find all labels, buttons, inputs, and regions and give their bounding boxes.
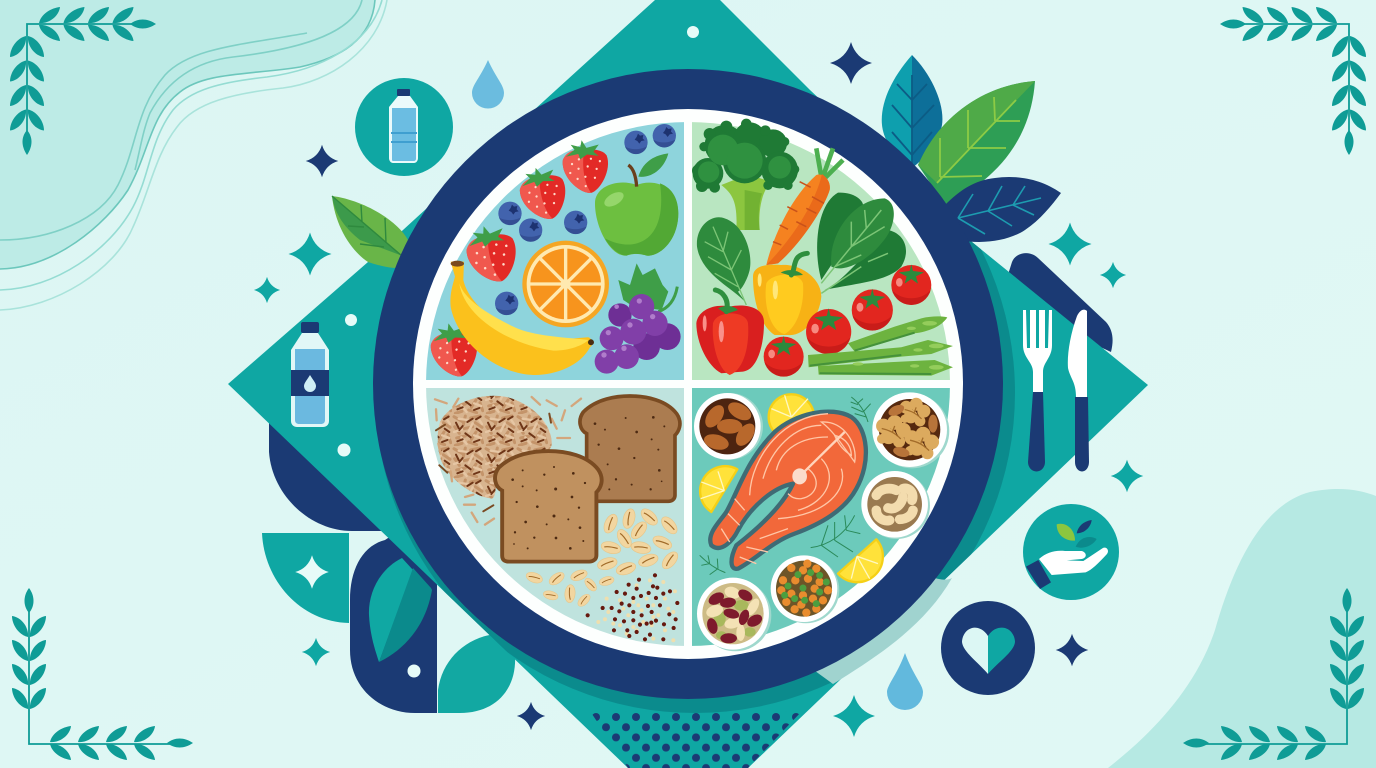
bottom-right blob xyxy=(1108,489,1376,768)
pale crescent under plate xyxy=(800,572,952,684)
strawberries xyxy=(427,138,611,381)
navy rounded shape with leaf xyxy=(350,530,437,713)
teal half round with star xyxy=(262,533,349,623)
icon: water drop top xyxy=(472,60,504,108)
corner sprig: bottom left xyxy=(12,588,193,760)
white dots on diamond xyxy=(338,26,699,456)
dark teal plate shadow xyxy=(381,242,1015,713)
icon: teal-blue leaf xyxy=(882,55,942,168)
bowl: peas and carrots xyxy=(771,555,839,623)
blueberries xyxy=(495,124,676,315)
tomatoes xyxy=(764,264,931,377)
icon: water bottle in circle xyxy=(355,78,453,176)
top-left wave shape xyxy=(0,0,387,310)
icon: left green leaf xyxy=(332,196,420,268)
vegetable items xyxy=(692,119,953,377)
icon: hand with sprout xyxy=(1023,504,1119,600)
icon: knife xyxy=(1068,310,1089,472)
oats xyxy=(525,506,681,609)
banana xyxy=(450,261,594,375)
plate divider xyxy=(416,112,960,656)
grain items xyxy=(435,396,681,640)
yellow pepper xyxy=(753,253,821,335)
fruit background xyxy=(426,120,684,380)
corner sprig: bottom right xyxy=(1183,588,1364,760)
icon: navy leaf xyxy=(945,177,1061,242)
apple xyxy=(595,153,678,256)
sparkle stars xyxy=(254,42,1143,737)
spinach leaf left xyxy=(697,217,750,305)
icon: fork xyxy=(1023,310,1052,472)
bowl: cashews xyxy=(861,471,930,539)
quadrant: protein xyxy=(692,388,952,651)
icon: water drop bottom xyxy=(887,653,923,710)
bowl: walnuts xyxy=(872,392,949,468)
bowl: almonds xyxy=(694,393,763,460)
teal diamond backdrop xyxy=(228,0,1148,768)
icon: heart in circle xyxy=(941,601,1035,695)
quadrant: vegetables xyxy=(692,119,953,380)
spinach leaves right xyxy=(817,193,906,293)
icon: white star xyxy=(295,555,329,589)
navy rounded tab behind right of diamond xyxy=(1000,253,1113,352)
quadrant: fruits xyxy=(426,120,684,381)
icon: sprout leaves xyxy=(1057,520,1097,548)
broccoli xyxy=(692,119,799,230)
icon: white drop xyxy=(304,375,316,392)
quadrant: whole grains xyxy=(426,388,684,650)
red pepper xyxy=(696,290,764,375)
front bread slice xyxy=(495,451,602,562)
wild rice pile xyxy=(435,396,581,525)
dot pattern xyxy=(590,711,802,768)
dill sprigs xyxy=(700,397,871,575)
corner sprig: top right xyxy=(1220,7,1366,155)
corner sprig: top left xyxy=(10,7,156,155)
teal round shape at bottom xyxy=(438,634,515,713)
bowl: mixed beans xyxy=(697,578,771,651)
carrot xyxy=(766,148,843,265)
orange slice xyxy=(522,241,609,327)
navy quarter shape left xyxy=(269,410,385,531)
back bread slice xyxy=(580,396,680,501)
vegetable background xyxy=(692,120,952,380)
grain background xyxy=(426,388,684,650)
plate inner white xyxy=(413,109,963,659)
fruit items xyxy=(427,124,681,381)
lemon wedges xyxy=(700,394,883,582)
icon: teal leaf xyxy=(369,558,432,662)
quinoa xyxy=(588,575,677,640)
asparagus xyxy=(808,316,953,376)
plate rim xyxy=(373,69,1003,699)
plate xyxy=(373,69,1003,699)
icon: water bottle on diamond xyxy=(291,322,329,427)
salmon steak xyxy=(710,412,866,569)
grapes xyxy=(595,263,681,374)
protein background xyxy=(692,388,952,650)
protein items xyxy=(694,392,949,651)
white dot xyxy=(408,664,420,678)
icon: big green leaf xyxy=(918,81,1035,205)
